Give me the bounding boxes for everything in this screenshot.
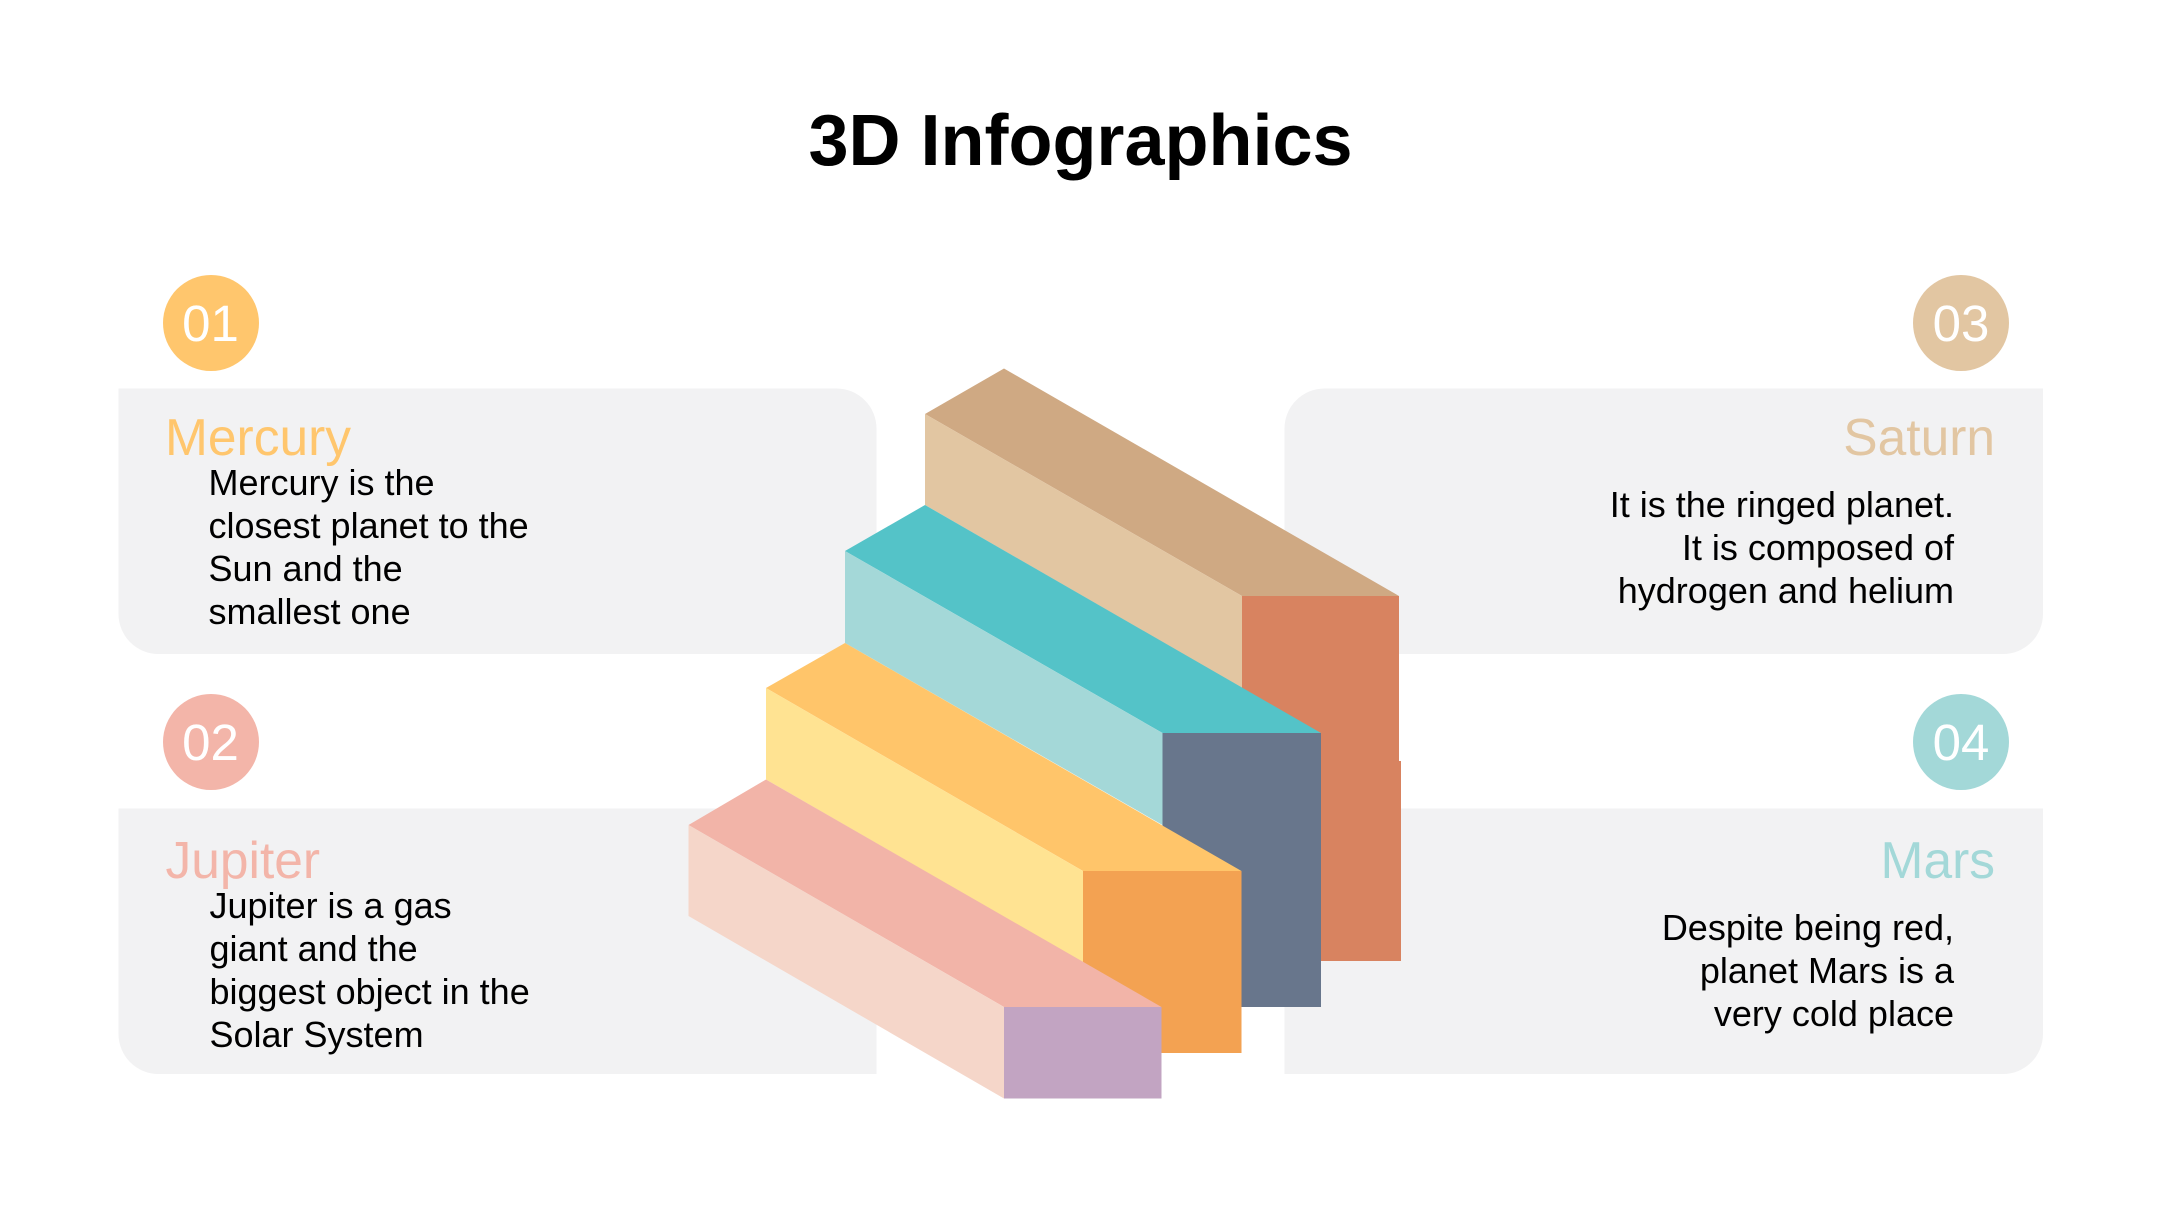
Saturn description: hydrogen and helium <box>1618 570 1954 611</box>
title: 3D Infographics <box>808 101 1353 181</box>
3D staircase <box>688 368 1401 1098</box>
Jupiter description: Solar System <box>210 1014 424 1055</box>
badge 01: 01 <box>182 295 239 352</box>
badge 04: 04 <box>1933 714 1989 771</box>
Mercury description: Mercury is the <box>208 462 435 503</box>
Saturn description: It is the ringed planet. <box>1610 484 1954 525</box>
step 2: yellow <box>766 643 1242 1053</box>
badge 02 <box>163 694 259 790</box>
Mars description: Despite being red, <box>1662 907 1954 948</box>
panel: Mercury <box>118 388 876 654</box>
Jupiter heading: Jupiter <box>166 831 320 889</box>
Mars description: very cold place <box>1714 993 1954 1034</box>
panel: Mars <box>1284 808 2043 1074</box>
Saturn description: It is composed of <box>1682 527 1955 568</box>
Saturn description <box>1610 484 1955 611</box>
badge 03: 03 <box>1933 295 1989 352</box>
step 4: tan <box>925 368 1401 961</box>
Mercury description: Sun and the <box>208 548 403 589</box>
panel: Saturn <box>1284 388 2043 654</box>
Jupiter description: giant and the <box>210 928 418 969</box>
Mercury description <box>208 462 529 632</box>
Jupiter description: Jupiter is a gas <box>210 885 452 926</box>
Mars description <box>1662 907 1955 1034</box>
Jupiter description <box>210 885 530 1055</box>
step 3: teal <box>845 505 1321 1007</box>
step 1: pink <box>688 780 1162 1098</box>
Saturn heading: Saturn <box>1843 408 1995 466</box>
Mercury heading: Mercury <box>165 408 351 466</box>
badge 01 <box>163 275 259 371</box>
Jupiter description: biggest object in the <box>210 971 530 1012</box>
Mercury description: smallest one <box>208 591 411 632</box>
panel: Jupiter <box>118 808 876 1074</box>
Mars heading: Mars <box>1881 831 1995 889</box>
badge 04 <box>1913 694 2009 790</box>
badge 02: 02 <box>182 714 239 771</box>
Mars description: planet Mars is a <box>1700 950 1955 991</box>
badge 03 <box>1913 275 2009 371</box>
Mercury description: closest planet to the <box>208 505 529 546</box>
